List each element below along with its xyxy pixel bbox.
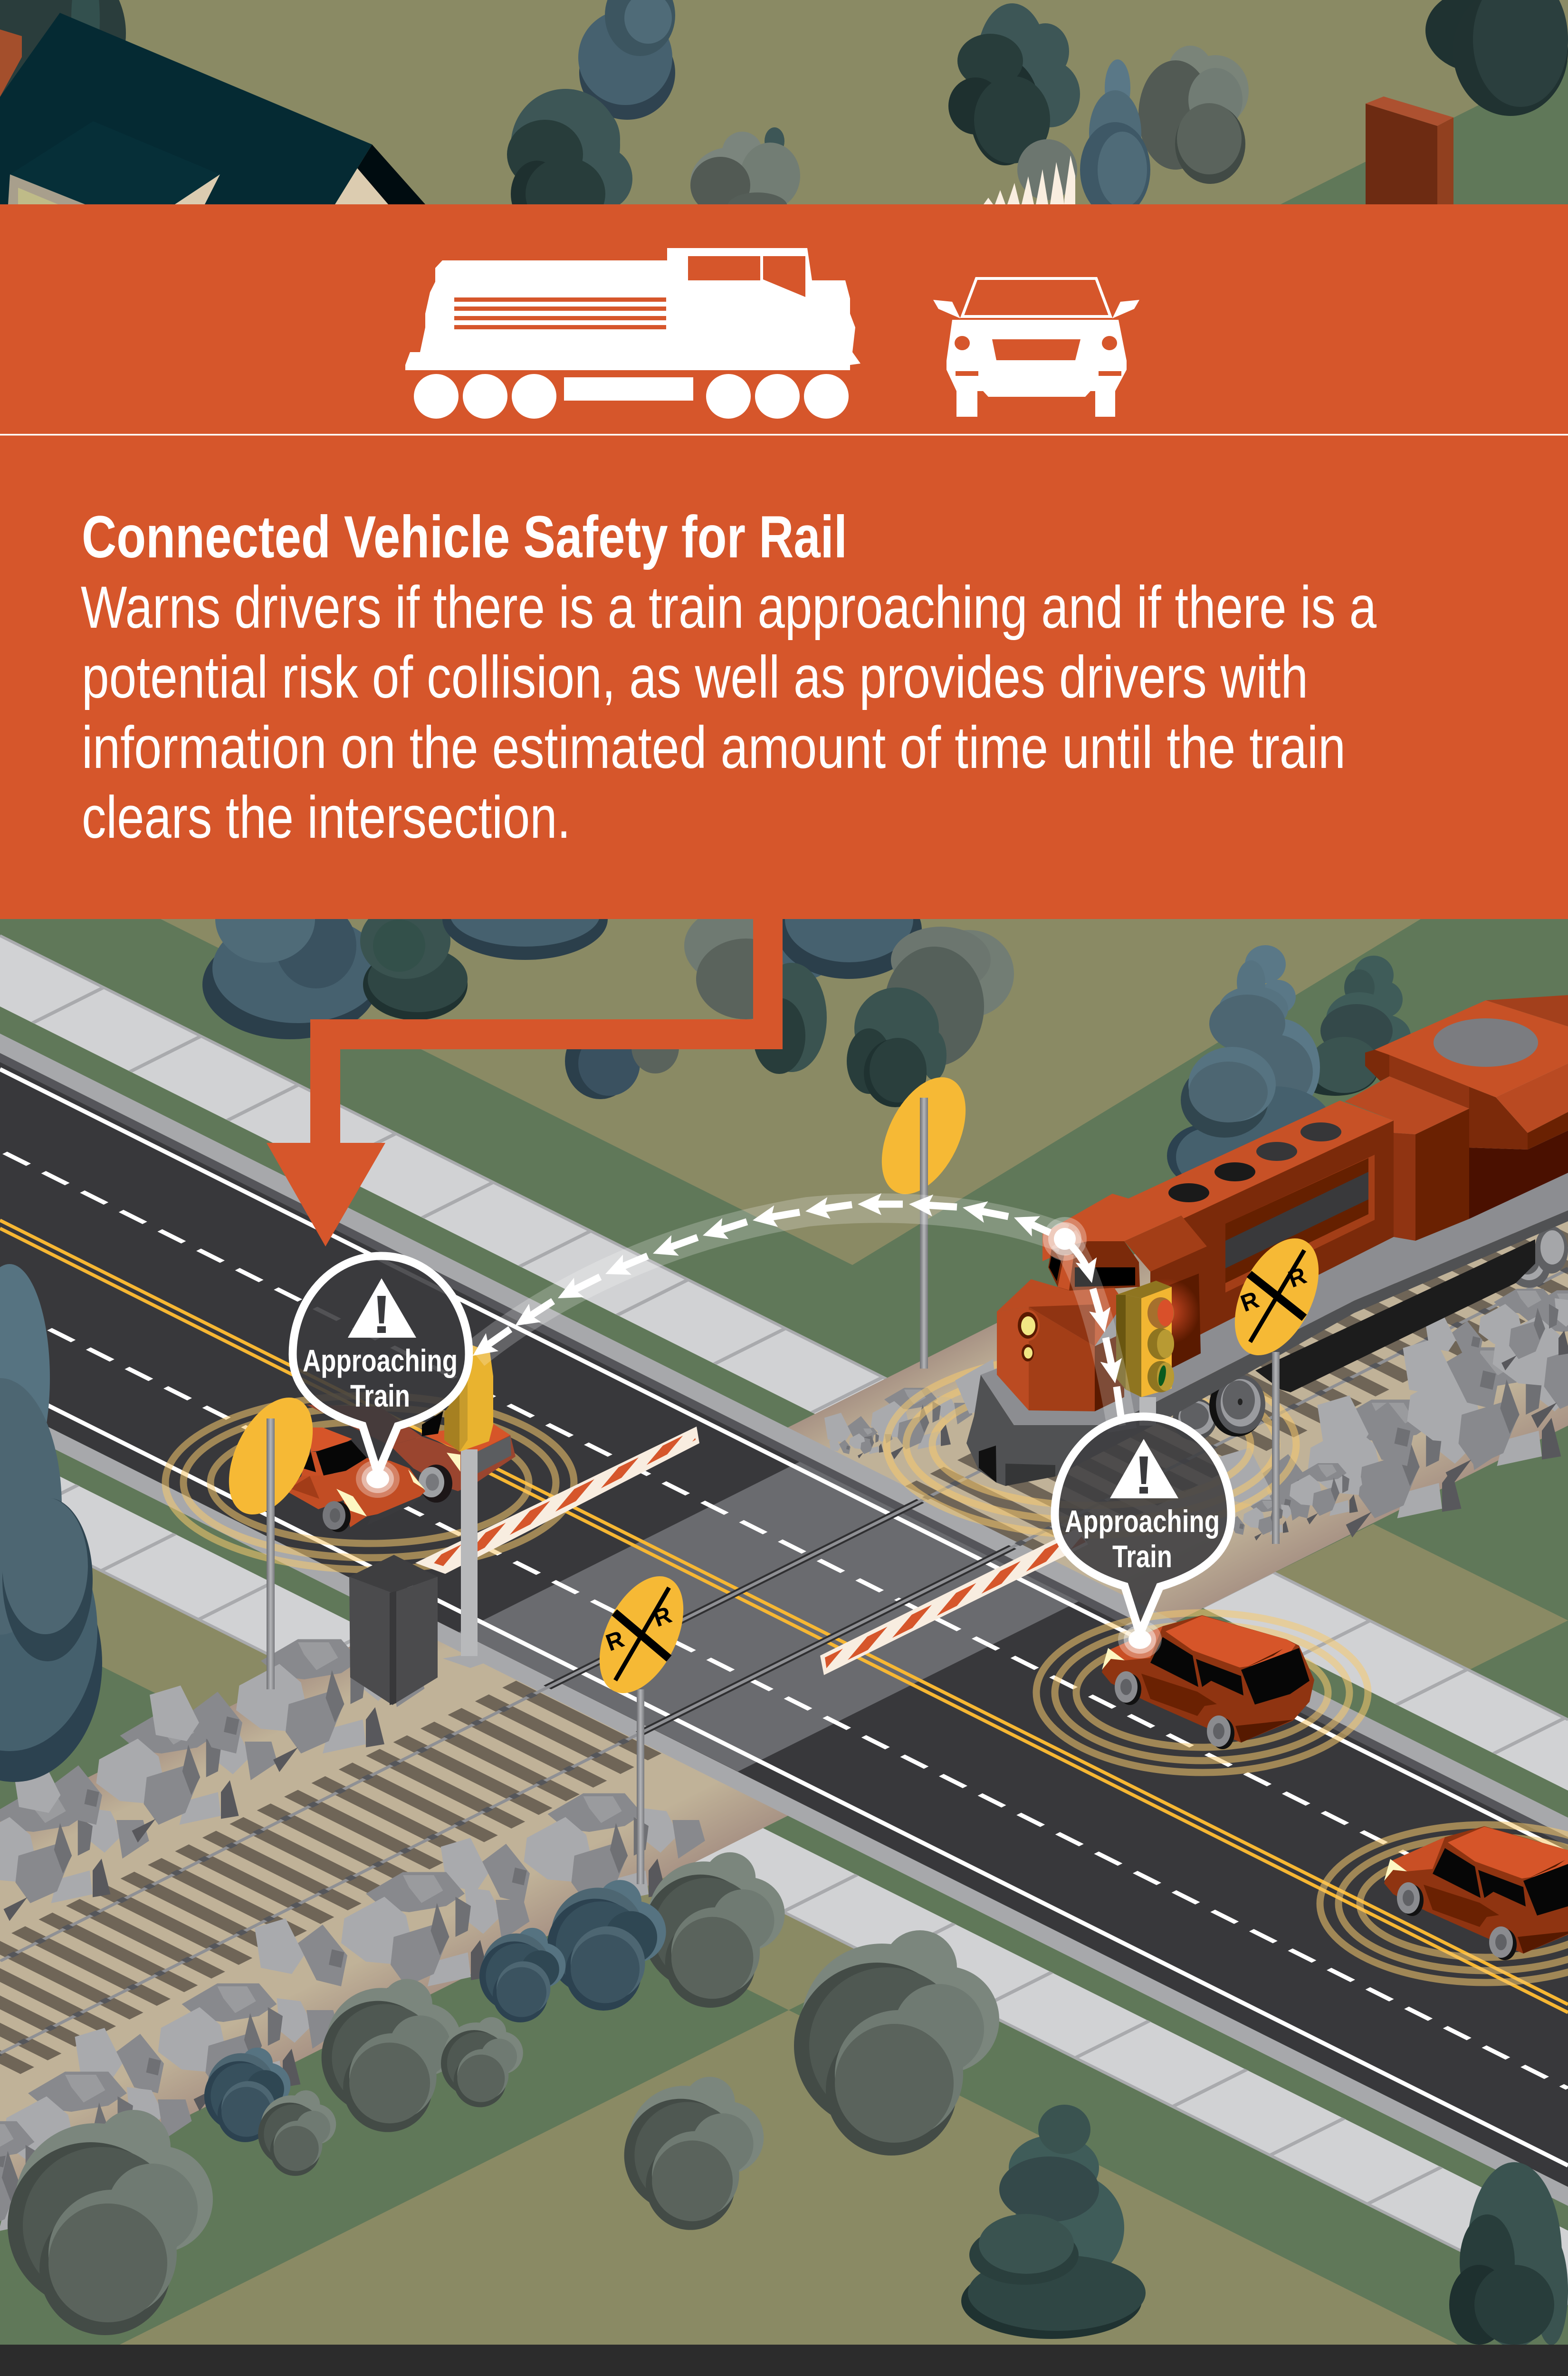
blue tree [1167,945,1332,1187]
traffic signal on pole [1116,1278,1200,1426]
large gray bush right [794,1930,999,2156]
dashed lane lines [0,1133,1568,2089]
heading: Connected Vehicle Safety for Rail [82,504,847,570]
dark conifer bottom [961,2105,1146,2339]
dark tree [507,89,632,230]
hood side grille [1225,1155,1375,1293]
white edge lines [0,1069,1568,2165]
rails [0,1177,1568,2057]
dark tree centre [847,987,947,1107]
tree top right [1425,0,1568,116]
bubble text [1065,1504,1220,1574]
description text [81,575,1377,851]
chimney [1366,96,1453,204]
hood vents [1168,1122,1341,1202]
foreground trees and bushes [0,1264,1568,2347]
locomotive [955,995,1568,1486]
nose [997,1279,1124,1411]
gray tree behind connector [684,908,796,1019]
small gray bush [441,2017,523,2107]
gate arm right [820,1528,1088,1675]
signal rings around right car [1320,1825,1568,1983]
front red car [287,1428,425,1532]
lower sidewalk [0,1447,1568,2304]
green lawn upper right [1281,60,1568,204]
chassis lower [966,1210,1568,1486]
icon: locomotive [405,248,860,419]
front wheels [1173,1375,1265,1441]
gate arm left [415,1427,699,1574]
orange info panel [0,204,1568,919]
signal rings around train [887,1354,1296,1535]
stone behind nose [955,1359,998,1414]
connector arrow from panel to car [267,917,783,1246]
big blue tree centre [776,877,922,979]
bubble text: Train [350,1378,410,1413]
wide blue tree [442,878,608,960]
gray bush [643,1852,785,2008]
small gray tree [1017,139,1077,200]
blue tree [578,0,675,120]
gray bush middle [322,1979,461,2132]
rear car at crossing [306,1405,516,1503]
divider line [0,434,1568,435]
description text: information on the estimated amount of time until the train [82,715,1346,781]
dark tree right [948,3,1080,165]
wireless message arc to middle car [1064,1238,1126,1430]
bubble text: Train [1112,1539,1172,1574]
right SUV [1384,1826,1568,1960]
fuel tank [1255,1239,1535,1392]
dark tree left of centre [753,963,827,1074]
yellow centre lines [0,1220,1568,2012]
tall blue tree left [0,1264,102,1782]
mid block [1345,1076,1469,1241]
cowl over cab [1124,1216,1207,1369]
blank sign back left [212,1384,330,1689]
bubble text: Approaching [303,1343,458,1378]
trees just below panel [202,875,1014,1107]
description text: potential risk of collision, as well as provides drivers with [82,644,1308,710]
blue bush small [479,1928,565,2022]
hood top [1042,1101,1394,1261]
blue tree [202,875,382,1039]
railroad crossing sign left: R [650,1601,675,1632]
icon: car [933,278,1139,417]
bubble text [303,1343,458,1413]
front coupler pieces [979,1446,1055,1486]
signal rings around first cars [165,1396,574,1570]
blue bush lower left [204,2048,290,2142]
middle SUV [1102,1615,1314,1749]
warning triangle [1110,1439,1178,1498]
railroad crossing sign left: R [602,1626,628,1657]
upper sidewalk [0,936,1568,1791]
top scenery: lawn, trees, house, fence [0,0,1568,230]
gray bush bottom centre [624,2077,764,2230]
callout bubble: middle car [1055,1417,1231,1658]
gray tree centre [884,927,1014,1066]
blue bush [547,1880,666,2011]
bubble text: Approaching [1065,1504,1220,1539]
rear upper cab [1365,995,1568,1219]
dark tree [1293,956,1411,1096]
long hood side [1150,1121,1394,1369]
trees behind train [1167,945,1411,1187]
gray tree right [1138,46,1249,184]
railroad crossing sign left [583,1563,700,1884]
picket fence [984,155,1075,204]
railroad crossing sign right: R [1237,1286,1262,1317]
footer bar [0,2345,1568,2376]
railroad ties [0,1229,1565,2038]
small gray bush lower left [258,2090,336,2176]
gravel piles along the track [0,1289,1568,2249]
description text: clears the intersection. [82,785,571,851]
dark green tree [360,903,468,1020]
signal rings around middle car [1036,1613,1368,1772]
tree behind house [0,0,126,114]
cab [1048,1241,1140,1291]
railroad crossing sign right [1218,1225,1336,1544]
warning triangle [348,1278,416,1338]
headlights [1016,1310,1040,1361]
ground below panel: lawns [0,839,1568,2376]
railroad crossing sign right: R [1285,1262,1310,1293]
small blue bush [565,1023,640,1099]
callout bubble: left car [293,1256,469,1498]
dark conifer right [1449,2162,1568,2347]
right wheels [1508,1226,1568,1288]
back signpost near train [865,1064,983,1369]
electrical cabinet [349,1555,438,1705]
house roof [0,13,425,204]
rail bed [0,1037,1568,2210]
chassis deck [981,1173,1568,1425]
large gray bush [8,2110,213,2335]
wireless message arc to left car [467,1193,1064,1365]
blue narrow tree [1080,59,1150,217]
train signal source dot [1043,1217,1087,1261]
gray tree [690,127,800,220]
road surface [0,1034,1568,2206]
signal post with yellow housing [443,1344,497,1668]
small gray bush [631,1021,679,1073]
